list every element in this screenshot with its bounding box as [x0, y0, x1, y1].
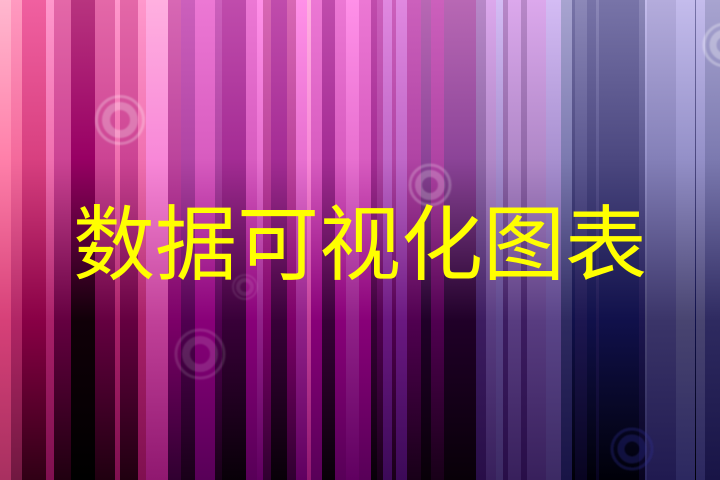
icon: ring centre: [410, 165, 450, 205]
title: 数据可视化图表: [73, 200, 647, 291]
icon: ring lower left: [176, 330, 224, 378]
icon: ring bottom right: [612, 429, 652, 469]
icon: ring small: [233, 275, 257, 299]
icon: ring top right: [704, 24, 720, 66]
icon: ring top left: [96, 96, 144, 144]
